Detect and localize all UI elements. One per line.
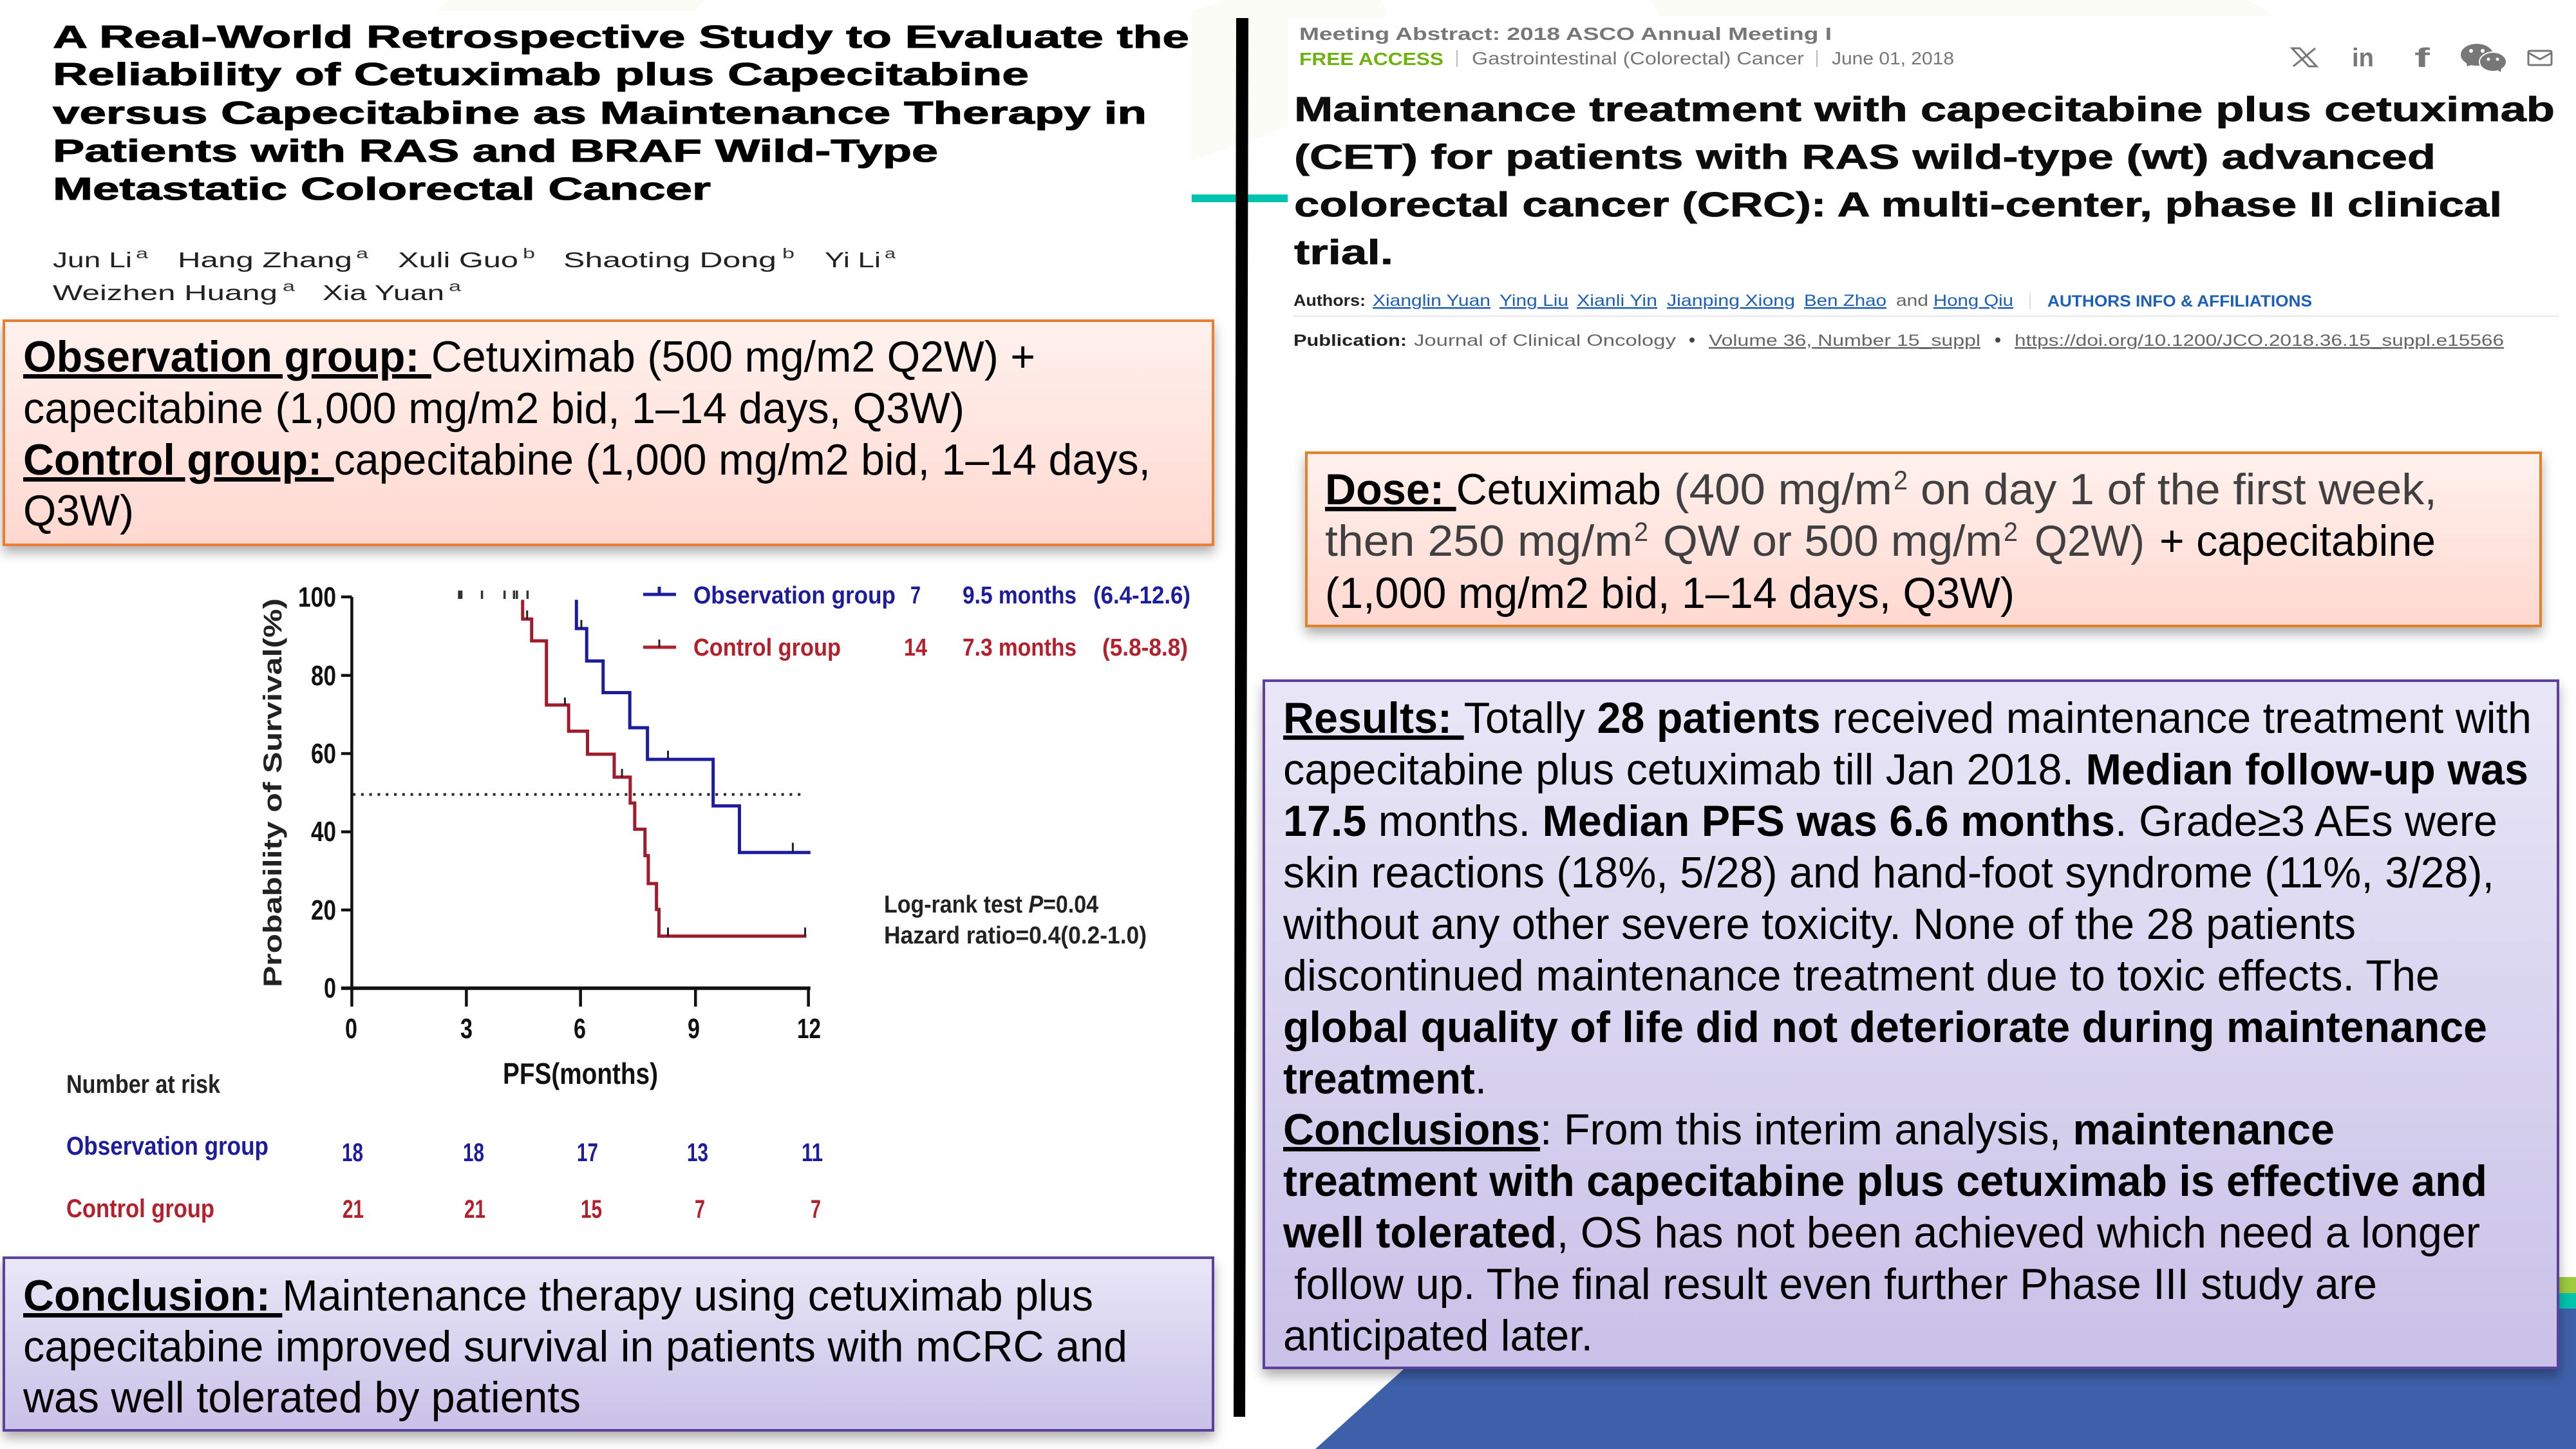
control group curve (523, 600, 806, 936)
text: results: discontinued maintenance treatment due to toxic effects. The (1283, 951, 2440, 1000)
y axis labels: 60 (311, 738, 336, 770)
right article authors: Ying Liu (1500, 292, 1568, 310)
legend: control group (643, 634, 1188, 661)
legend: observation group: 7 (910, 582, 921, 609)
median survival reference line (353, 793, 805, 796)
panel: dose: (1,000 mg/m2 bid, 1–14 days, Q3W) (1325, 569, 2015, 618)
control group row: 21 (343, 1195, 364, 1224)
panel: dose (1306, 453, 2541, 626)
text: results: global quality of life did not deteriorate during maintenance (1283, 1003, 2487, 1052)
left article authors: a (136, 245, 149, 261)
legend: control group: 7.3 months (963, 634, 1076, 661)
x axis labels (345, 1013, 821, 1045)
panel: results and conclusions (1264, 681, 2558, 1368)
observation group row: Observation group (66, 1132, 268, 1160)
right article header panel (1288, 18, 2562, 366)
publication details (1293, 332, 2504, 350)
right article authors: Hong Qiu (1933, 292, 2013, 310)
left article authors: Jun Li (53, 248, 132, 272)
panel: dose: on day 1 of the first week, (1921, 465, 2437, 514)
text: results: skin reactions (18%, 5/28) and hand-foot syndrome (11%, 3/28), (1283, 848, 2494, 897)
right article authors: Authors: (1293, 292, 1366, 310)
panel: dose: 2 (2004, 516, 2018, 547)
observation group curve (576, 600, 811, 853)
right article title: trial. (1294, 233, 1393, 272)
panel: treatment groups (4, 321, 1213, 545)
x axis labels: 0 (345, 1013, 357, 1045)
x axis labels: 6 (574, 1013, 586, 1045)
right article authors: Jianping Xiong (1667, 292, 1795, 310)
x axis labels: 12 (797, 1013, 821, 1045)
right article title (1294, 90, 2555, 272)
x axis labels: 9 (688, 1013, 700, 1045)
left article title (53, 20, 1189, 207)
panel: treatment groups: Control group: capecitabine (1,000 mg/m2 bid, 1–14 days, (23, 435, 1151, 484)
text: conclusions: follow up. The final result even further Phase III study are (1294, 1260, 2377, 1309)
statistics note: Hazard ratio=0.4(0.2-1.0) (884, 922, 1147, 949)
observation group row: 18 (463, 1139, 484, 1167)
legend: control group: (5.8-8.8) (1102, 634, 1188, 661)
right article title: colorectal cancer (CRC): A multi-center, phase II clinical (1294, 185, 2502, 224)
text: results: without any other severe toxicity. None of the 28 patients (1283, 900, 2356, 949)
control group row: 7 (695, 1195, 705, 1224)
icon: facebook: f (2414, 43, 2431, 73)
panel: treatment groups: capecitabine (1,000 mg/m2 bid, 1–14 days, Q3W) (23, 384, 964, 433)
text: conclusions: Conclusions: From this interim analysis, maintenance (1283, 1105, 2335, 1154)
publication details: Journal of Clinical Oncology (1414, 332, 1677, 350)
statistics note: Log-rank test P=0.04 (884, 891, 1098, 918)
y axis labels (298, 582, 336, 1004)
left article title: A Real-World Retrospective Study to Evaluate the (53, 20, 1189, 55)
icon: linkedin: in (2352, 44, 2374, 72)
survival chart (66, 582, 1190, 1224)
panel: left conclusion: was well tolerated by patients (23, 1373, 581, 1422)
text: observation group: Observation group: Cetuximab (500 mg/m2 Q2W) + (23, 332, 1035, 381)
teal accent line (1192, 194, 1288, 202)
control group row (66, 1195, 821, 1224)
publication details: Publication: (1293, 332, 1407, 350)
y axis labels: 40 (311, 816, 336, 848)
control group row: 15 (581, 1195, 602, 1224)
x axis title: PFS(months) (503, 1057, 658, 1090)
right article authors: AUTHORS INFO & AFFILIATIONS (2047, 292, 2312, 310)
icon: wechat (2461, 44, 2506, 72)
icon: mail (2528, 51, 2552, 65)
left article title: Reliability of Cetuximab plus Capecitabine (53, 57, 1029, 92)
left article authors: b (523, 245, 535, 261)
left article authors: Shaoting Dong (563, 248, 776, 272)
panel: dose: 2 (1634, 516, 1648, 547)
control group row: Control group (66, 1195, 214, 1223)
left article title: versus Capecitabine as Maintenance Therapy in (53, 96, 1147, 131)
censor marks at top (460, 591, 527, 599)
left article authors (53, 245, 896, 305)
panel: dose: then 250 mg/m (1325, 516, 1633, 565)
observation group row: 17 (577, 1139, 598, 1167)
panel: dose: 2 (1894, 465, 1908, 495)
legend: observation group: Observation group (693, 582, 896, 609)
publication details: Volume 36, Number 15_suppl (1709, 332, 1980, 350)
number at risk table (66, 1070, 823, 1224)
control group row: 7 (811, 1195, 821, 1224)
observation group row: 13 (687, 1139, 708, 1167)
text: results (1283, 694, 2532, 1103)
number at risk table: Number at risk (66, 1070, 221, 1099)
y axis labels: 80 (311, 660, 336, 692)
y axis labels: 100 (298, 582, 336, 613)
left article title: Metastatic Colorectal Cancer (53, 172, 711, 207)
right article authors: Xianli Yin (1577, 292, 1657, 310)
left article authors: a (283, 278, 296, 294)
meeting label: Meeting Abstract: 2018 ASCO Annual Meeting I (1299, 24, 1832, 44)
text: conclusions: anticipated later. (1283, 1311, 1593, 1360)
y axis title: Probability of Survival(%) (259, 598, 287, 987)
right article title: Maintenance treatment with capecitabine plus cetuximab (1294, 90, 2555, 129)
panel: dose: (400 mg/m (1674, 465, 1892, 514)
right article title: (CET) for patients with RAS wild-type (wt) advanced (1294, 138, 2436, 176)
legend: observation group: (6.4-12.6) (1093, 582, 1190, 609)
text: results: 17.5 months. Median PFS was 6.6 months. Grade≥3 AEs were (1283, 797, 2497, 846)
left article authors: Xia Yuan (323, 281, 444, 305)
text: conclusions (1283, 1105, 2487, 1360)
panel: dose: QW or 500 mg/m (1663, 516, 2002, 565)
text: results: Results: Totally 28 patients received maintenance treatment with (1283, 694, 2532, 743)
observation group row: 11 (802, 1139, 823, 1167)
left article authors: Xuli Guo (398, 248, 518, 272)
left article authors: Hang Zhang (178, 248, 352, 272)
left article authors: Yi Li (825, 248, 881, 272)
background: teal accent tab (2550, 1293, 2576, 1309)
left article authors: a (449, 278, 462, 294)
statistics note (884, 891, 1147, 949)
text: results: capecitabine plus cetuximab till Jan 2018. Median follow-up was (1283, 745, 2528, 794)
observation group row (66, 1132, 823, 1167)
left article authors: a (356, 245, 369, 261)
panel: left conclusion (4, 1258, 1213, 1430)
text: results: treatment. (1283, 1054, 1487, 1103)
left article authors: Weizhen Huang (53, 281, 277, 305)
right article authors: and (1896, 292, 1928, 310)
article metadata: June 01, 2018 (1832, 48, 1954, 68)
panel: dose: + capecitabine (2159, 516, 2436, 565)
article metadata (1299, 48, 1954, 69)
background: blue corner shape (1315, 1309, 2576, 1449)
legend: observation group: 9.5 months (963, 582, 1076, 609)
text: conclusions: treatment with capecitabine plus cetuximab is effective and (1283, 1157, 2487, 1206)
control group row: 21 (464, 1195, 485, 1224)
panel: dose: Dose: Cetuximab (1325, 465, 1661, 514)
article metadata: FREE ACCESS (1299, 49, 1443, 69)
article metadata: Gastrointestinal (Colorectal) Cancer (1472, 48, 1804, 68)
left article authors: a (885, 245, 896, 261)
y axis labels: 20 (311, 895, 336, 926)
right article authors: Ben Zhao (1804, 292, 1886, 310)
text: conclusions: well tolerated, OS has not been achieved which need a longer (1283, 1208, 2480, 1257)
legend: control group: 14 (904, 634, 927, 661)
panel: treatment groups: Q3W) (23, 486, 134, 535)
panel: left conclusion: Conclusion: Maintenance therapy using cetuximab plus (23, 1271, 1093, 1320)
y axis labels: 0 (324, 972, 336, 1004)
icon: X (2292, 48, 2317, 66)
left article title: Patients with RAS and BRAF Wild-Type (53, 134, 938, 169)
publication details: https://doi.org/10.1200/JCO.2018.36.15_suppl.e15566 (2015, 332, 2504, 350)
vertical divider (1234, 18, 1248, 1417)
panel: dose: Q2W) (2035, 516, 2145, 565)
plot axes (341, 597, 811, 1007)
legend: control group: Control group (693, 634, 841, 661)
x axis labels: 3 (460, 1013, 473, 1045)
observation group row: 18 (342, 1139, 363, 1167)
right article authors: Xianglin Yuan (1373, 292, 1490, 310)
legend: observation group (643, 582, 1190, 609)
background: green accent tab (2550, 1277, 2576, 1293)
left article authors: b (782, 245, 794, 261)
panel: left conclusion: capecitabine improved survival in patients with mCRC and (23, 1322, 1127, 1371)
right article authors (1293, 292, 2312, 310)
